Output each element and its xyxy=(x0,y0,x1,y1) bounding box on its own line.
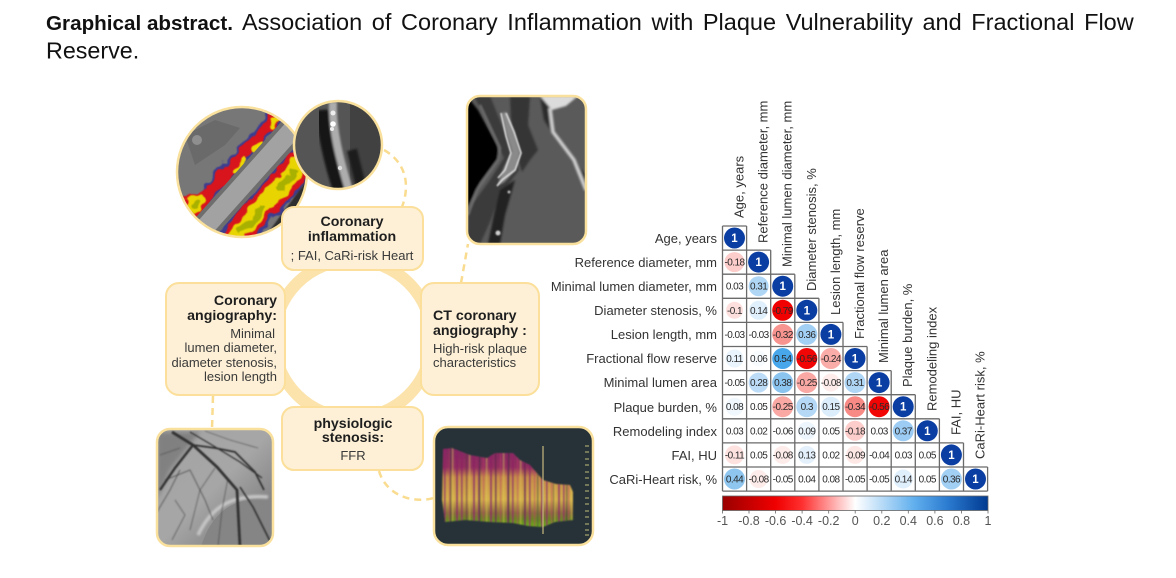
row 11: 1 xyxy=(972,474,979,486)
dashed connector: physiologic stenosis xyxy=(379,471,434,500)
column labels: Lesion length, mm xyxy=(828,209,843,315)
row 8: 1 xyxy=(900,402,907,414)
dashed connector: coronary inflammation xyxy=(384,150,406,207)
colour scale legend: -1 xyxy=(717,514,728,528)
image: FFR pressure trace xyxy=(434,427,593,545)
title: Reserve. xyxy=(46,38,139,64)
panel: coronary angiography: Minimal xyxy=(230,326,275,341)
row 10: 0.05 xyxy=(919,450,937,461)
row 5: 1 xyxy=(828,329,835,341)
panel: coronary inflammation: inflammation xyxy=(308,229,396,245)
dashed connector: coronary angiography xyxy=(212,396,213,429)
row labels: Diameter stenosis, % xyxy=(594,303,717,318)
column labels: Remodeling index xyxy=(924,306,939,411)
row 3 xyxy=(726,276,793,297)
row 6: 0.54 xyxy=(774,354,792,365)
column labels: Minimal lumen area xyxy=(876,249,891,363)
row 10: 0.02 xyxy=(822,450,841,461)
row 10: -0.11 xyxy=(725,450,745,461)
row 11: -0.05 xyxy=(773,474,794,486)
colour scale legend: 0.4 xyxy=(900,514,917,528)
row labels: Remodeling index xyxy=(613,424,717,439)
row labels: FAI, HU xyxy=(671,448,717,463)
row 2: 1 xyxy=(755,257,762,269)
panel: coronary inflammation: ; FAI, CaRi-risk Heart xyxy=(291,248,414,263)
row 2: -0.18 xyxy=(724,258,746,269)
row labels: Plaque burden, % xyxy=(614,400,717,415)
correlation matrix xyxy=(551,101,988,491)
column labels: CaRi-Heart risk, % xyxy=(972,351,988,459)
row 4 xyxy=(726,300,817,321)
row 6: 1 xyxy=(852,354,859,366)
row 9: 0.02 xyxy=(750,426,768,437)
row 9: -0.18 xyxy=(845,426,866,437)
row labels xyxy=(551,231,718,487)
panel: coronary angiography: lumen diameter, xyxy=(184,340,277,355)
row labels: Reference diameter, mm xyxy=(575,255,717,270)
row 10: 0.03 xyxy=(895,450,913,461)
colour scale legend: 0.6 xyxy=(926,514,944,528)
row 9 xyxy=(726,420,938,441)
row 1 xyxy=(724,228,745,248)
row 11: 0.04 xyxy=(798,474,816,486)
colour scale legend: -0.2 xyxy=(818,514,840,528)
row 6: 0.11 xyxy=(726,354,744,365)
row 11: 0.05 xyxy=(919,474,937,486)
row labels: Lesion length, mm xyxy=(611,327,717,342)
row 7: 1 xyxy=(876,378,883,390)
row 9: 0.05 xyxy=(822,426,841,437)
row 3: 0.31 xyxy=(750,282,768,293)
row 1: 1 xyxy=(731,233,738,245)
colour scale legend xyxy=(717,496,992,528)
row 9: -0.06 xyxy=(773,426,794,437)
row 7: -0.25 xyxy=(797,378,818,389)
row 4: 0.14 xyxy=(750,306,768,317)
column labels: Diameter stenosis, % xyxy=(804,168,819,291)
row 10: 0.05 xyxy=(750,450,768,461)
row 7: 0.31 xyxy=(846,378,865,389)
row 9: 0.03 xyxy=(726,426,744,437)
image: invasive coronary angiogram xyxy=(157,429,275,550)
row 2 xyxy=(724,252,769,273)
image: CT coronary angiography scan xyxy=(467,96,586,244)
row 11 xyxy=(724,468,986,490)
row 11: 0.44 xyxy=(726,474,744,486)
row 10: -0.08 xyxy=(773,450,794,461)
panel: coronary angiography xyxy=(166,283,285,395)
panel: CT coronary angiography: High-risk plaque xyxy=(433,341,527,356)
row 7: 0.38 xyxy=(774,378,792,389)
colour scale legend: -0.6 xyxy=(765,514,786,528)
colour scale legend: 1 xyxy=(985,514,992,528)
column labels: Fractional flow reserve xyxy=(852,208,867,339)
row 6: 0.06 xyxy=(750,354,768,365)
row 11: 0.14 xyxy=(895,474,913,486)
row 4: 1 xyxy=(804,305,811,317)
row 11: -0.05 xyxy=(869,474,890,486)
panel: coronary angiography: angiography: xyxy=(187,308,277,324)
row 9: 0.03 xyxy=(870,426,889,437)
row labels: Minimal lumen area xyxy=(604,375,718,390)
column labels xyxy=(732,101,988,459)
panel: physiologic stenosis: FFR xyxy=(340,448,366,463)
row 5 xyxy=(724,324,841,345)
panel: coronary inflammation xyxy=(282,207,423,270)
row 8: 0.05 xyxy=(750,402,768,413)
row 11: 0.36 xyxy=(943,474,961,486)
row 3: 1 xyxy=(779,281,786,293)
panel: physiologic stenosis: stenosis: xyxy=(322,430,384,446)
column labels: Plaque burden, % xyxy=(900,283,915,387)
title: Graphical abstract. xyxy=(46,13,233,35)
panel: CT coronary angiography: CT coronary xyxy=(433,308,517,324)
row labels: Minimal lumen diameter, mm xyxy=(551,279,717,294)
row 4: -0.79 xyxy=(773,306,794,317)
column labels: Age, years xyxy=(732,155,746,218)
row 8: -0.56 xyxy=(869,402,890,413)
column labels: FAI, HU xyxy=(948,389,963,435)
colour scale legend: 0 xyxy=(852,514,859,528)
connector ring xyxy=(274,260,432,418)
row 9: 1 xyxy=(924,426,931,438)
dashed connector: CT angiography xyxy=(461,244,468,283)
row 5: 0.36 xyxy=(798,330,816,341)
column labels: Reference diameter, mm xyxy=(756,101,771,243)
panel: CT coronary angiography: angiography : xyxy=(433,323,527,339)
row 8: 0.15 xyxy=(822,402,841,413)
row 9: 0.09 xyxy=(798,426,816,437)
title: Association of Coronary Inflammation with Plaque Vulnerability and Fractional Flow xyxy=(242,9,1135,35)
row 6: -0.56 xyxy=(797,354,818,365)
colour scale legend: -0.8 xyxy=(738,514,760,528)
colour scale legend: 0.8 xyxy=(953,514,970,528)
row 8: -0.34 xyxy=(845,402,866,413)
panel: CT coronary angiography: characteristics xyxy=(433,355,517,370)
row labels: CaRi-Heart risk, % xyxy=(609,472,717,487)
row 3: 0.03 xyxy=(726,282,744,293)
row 7: -0.08 xyxy=(821,378,842,389)
row 11: 0.08 xyxy=(822,474,841,486)
row 8: 0.08 xyxy=(726,402,744,413)
colour scale legend: 0.2 xyxy=(873,514,891,528)
row labels: Fractional flow reserve xyxy=(586,351,717,366)
panel: coronary inflammation: Coronary xyxy=(320,214,384,230)
row 5: -0.32 xyxy=(773,330,794,341)
panel: CT coronary angiography xyxy=(421,283,539,395)
panel: physiologic stenosis xyxy=(282,407,423,470)
row 10: -0.09 xyxy=(845,450,866,461)
panel: coronary angiography: lesion length xyxy=(204,369,277,384)
row 10: 0.13 xyxy=(798,450,816,461)
row 10 xyxy=(725,444,962,465)
panel: physiologic stenosis: physiologic xyxy=(314,416,393,432)
row 7 xyxy=(724,372,890,393)
row 8 xyxy=(726,396,914,417)
row 7: -0.05 xyxy=(724,378,746,389)
title xyxy=(46,9,1135,64)
row 4: -0.1 xyxy=(727,306,743,317)
row 10: 1 xyxy=(948,450,955,462)
grid xyxy=(722,226,988,491)
colour scale legend: -0.4 xyxy=(791,514,813,528)
row 9: 0.37 xyxy=(895,426,913,437)
row 11: -0.08 xyxy=(749,474,770,486)
row 5: -0.03 xyxy=(749,330,770,341)
row 7: 0.28 xyxy=(750,378,768,389)
row 11: -0.05 xyxy=(845,474,866,486)
panel: coronary angiography: diameter stenosis, xyxy=(172,355,277,370)
row labels: Age, years xyxy=(655,231,717,246)
panel: coronary angiography: Coronary xyxy=(214,293,277,309)
row 8: -0.25 xyxy=(773,402,794,413)
column labels: Minimal lumen diameter, mm xyxy=(780,101,795,267)
row 6: -0.24 xyxy=(821,354,842,365)
row 5: -0.03 xyxy=(724,330,746,341)
row 10: -0.04 xyxy=(869,450,890,461)
row 8: 0.3 xyxy=(801,402,814,413)
row 6 xyxy=(726,348,866,369)
image: CT vessel close-up xyxy=(290,98,386,192)
image: inflammation heat map xyxy=(176,106,308,238)
